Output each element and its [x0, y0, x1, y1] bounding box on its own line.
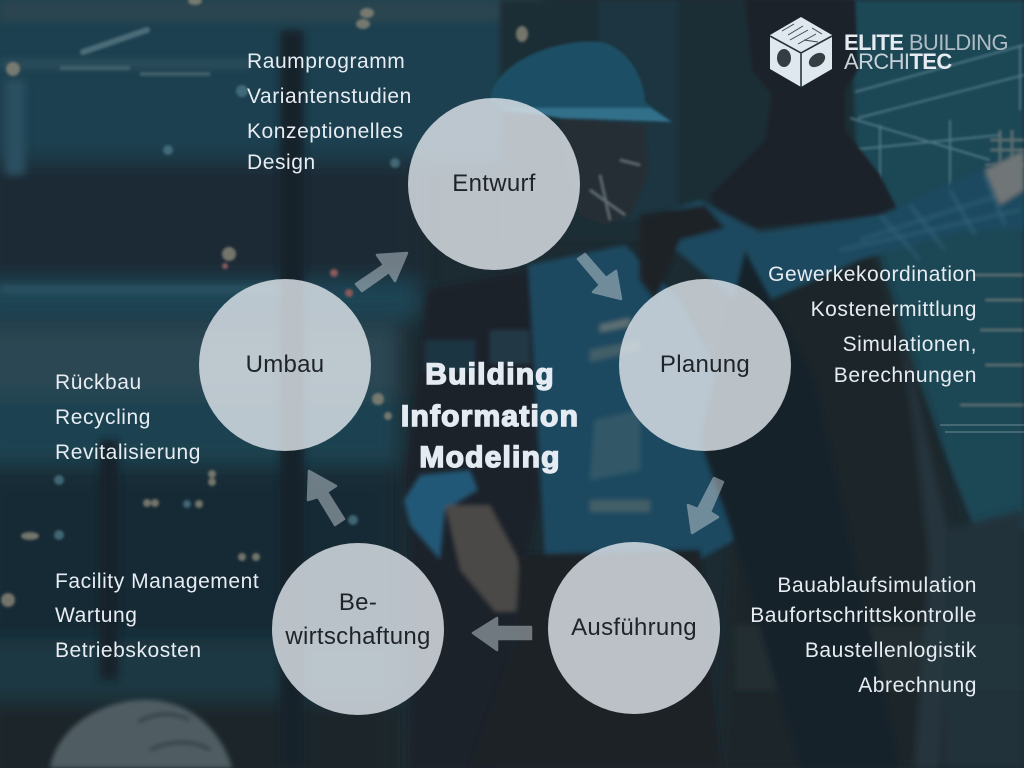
circle: Umbau: Umbau [246, 351, 324, 378]
circle: Entwurf: Entwurf [452, 170, 536, 197]
logo: Elite Building Architec [770, 17, 1008, 87]
text: Entwurf items: Konzeptionelles [247, 120, 404, 143]
text: Entwurf items [247, 50, 412, 174]
icon: cube [770, 17, 832, 87]
second person silhouette [710, 0, 900, 230]
text: Entwurf items: Variantenstudien [247, 85, 412, 108]
circle: Umbau [199, 279, 371, 451]
bokeh lights [1, 0, 528, 607]
logo wordmark [844, 30, 1008, 74]
wireframe structure [850, 45, 1024, 200]
logo wordmark: ELITE BUILDING [844, 30, 1008, 55]
helmet lower left [50, 700, 232, 768]
circle: Bewirtschaftung [272, 543, 444, 715]
text: Entwurf items: Design [247, 151, 316, 174]
arrow: Entwurf to Planung [578, 254, 621, 299]
text: Umbau items: Revitalisierung [55, 441, 201, 464]
circle: Planung [619, 279, 791, 451]
circle: Ausführung [548, 542, 720, 714]
circle: Entwurf [408, 98, 580, 270]
text: Planung items: Simulationen, [843, 333, 977, 356]
logo wordmark: ARCHITEC [844, 49, 952, 74]
coat, right side [720, 230, 1024, 768]
arrow: Planung to Ausführung [688, 478, 723, 533]
text: Bewirtschaftung items: Betriebskosten [55, 639, 202, 662]
arrow: Umbau to Entwurf [356, 253, 407, 291]
text: Umbau items [55, 371, 201, 464]
text: Umbau items: Recycling [55, 406, 151, 429]
text: Planung items: Berechnungen [834, 364, 977, 387]
text: Planung items: Kostenermittlung [811, 298, 977, 321]
man: shirt [528, 245, 735, 565]
upper middle backdrop [500, 0, 860, 240]
text: Ausführung items: Abrechnung [858, 674, 977, 697]
circle: Bewirtschaftung: wirtschaftung [285, 623, 431, 650]
lower dark trousers [470, 550, 720, 768]
circle: Ausführung: Ausführung [571, 614, 697, 641]
text: Ausführung items: Bauablaufsimulation [777, 574, 977, 597]
man: cuff and hand [404, 470, 535, 612]
text: Bewirtschaftung items [55, 570, 259, 662]
text: Ausführung items: Baufortschrittskontrolle [750, 604, 977, 627]
circle: Planung: Planung [660, 351, 750, 378]
man: hard hat and face [490, 42, 672, 225]
title: Building Information Modeling: Building [425, 358, 555, 391]
text: Bewirtschaftung items: Wartung [55, 604, 137, 627]
right wall [850, 0, 1024, 530]
text: Entwurf items: Raumprogramm [247, 50, 405, 73]
text: Bewirtschaftung items: Facility Management [55, 570, 259, 593]
title: Building Information Modeling: Modeling [419, 441, 561, 474]
text: Umbau items: Rückbau [55, 371, 142, 394]
man: outstretched arm [640, 150, 1024, 768]
text: Ausführung items [750, 574, 977, 697]
text: Planung items: Gewerkekoordination [768, 263, 977, 286]
title: Building Information Modeling [401, 358, 579, 474]
text: Planung items [768, 263, 977, 387]
man: left coat [405, 270, 538, 768]
title: Building Information Modeling: Information [401, 400, 579, 432]
arrow: Bewirtschaftung to Umbau [308, 471, 344, 525]
circle: Bewirtschaftung: Be- [339, 589, 377, 616]
arrow: Ausführung to Bewirtschaftung [473, 618, 531, 650]
text: Ausführung items: Baustellenlogistik [805, 639, 977, 662]
